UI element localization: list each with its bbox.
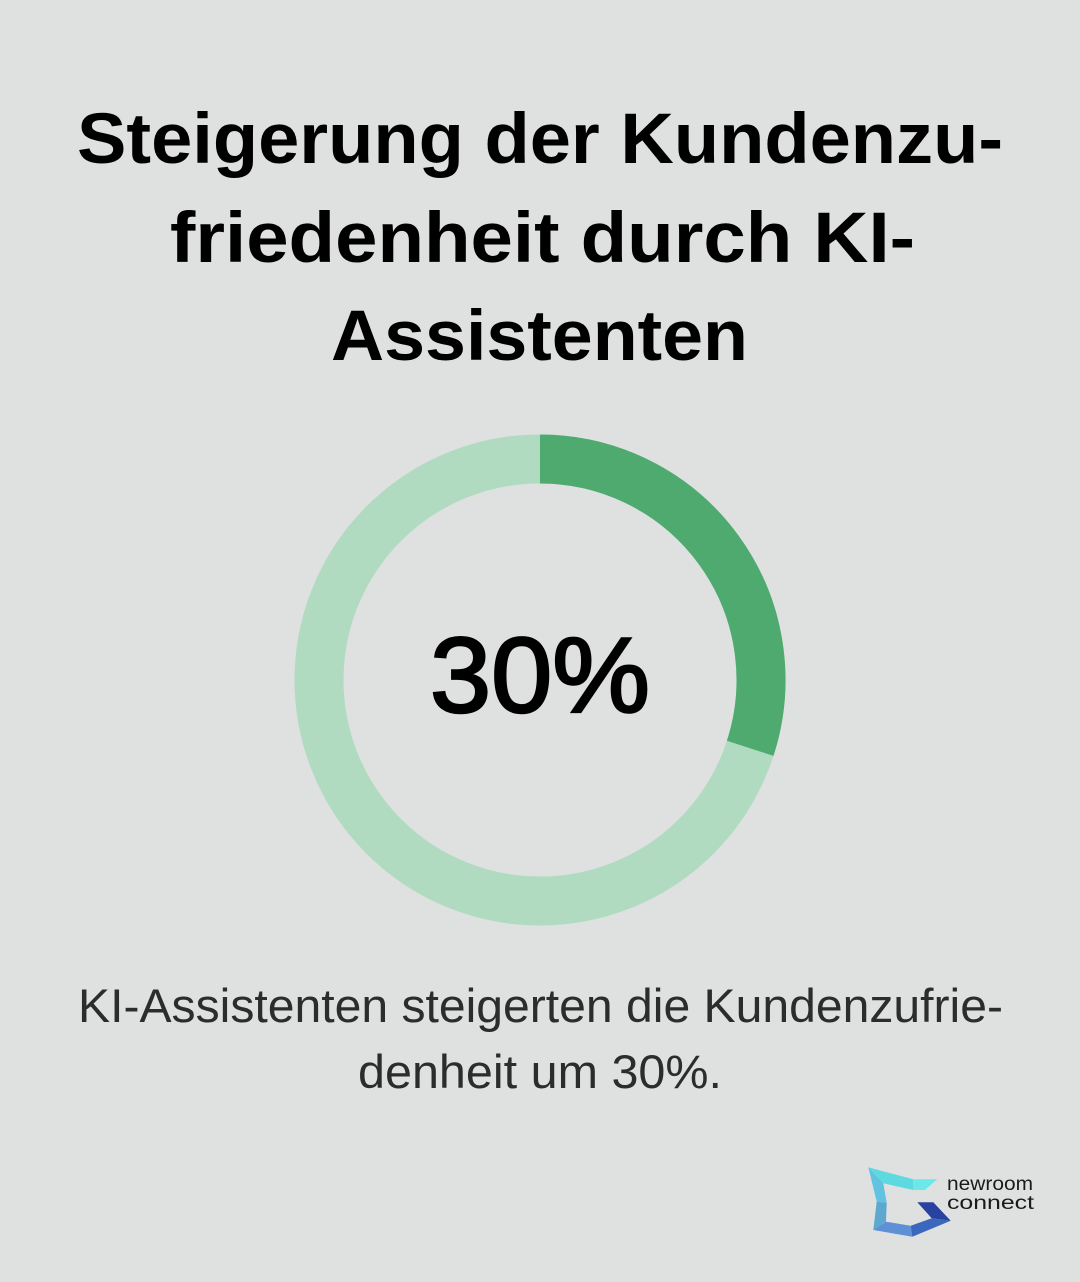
logo wordmark: newroom (947, 1174, 1033, 1195)
donut track (319, 459, 761, 901)
donut value segment (540, 459, 761, 748)
title: Assistenten (331, 297, 748, 376)
logo icon (868, 1167, 951, 1237)
donut chart: 30% (319, 459, 761, 901)
logo: newroom connect (868, 1167, 1035, 1237)
center value: 30% (430, 615, 650, 735)
description text: denheit um 30%. (358, 1045, 722, 1098)
logo wordmark (947, 1174, 1035, 1214)
description text: KI-Assistenten steigerten die Kundenzufrie- (78, 979, 1003, 1032)
description text (78, 979, 1003, 1098)
title: friedenheit durch KI- (170, 199, 915, 278)
logo wordmark: connect (947, 1193, 1035, 1214)
title: Steigerung der Kundenzu- (77, 100, 1003, 179)
title (77, 100, 1003, 376)
